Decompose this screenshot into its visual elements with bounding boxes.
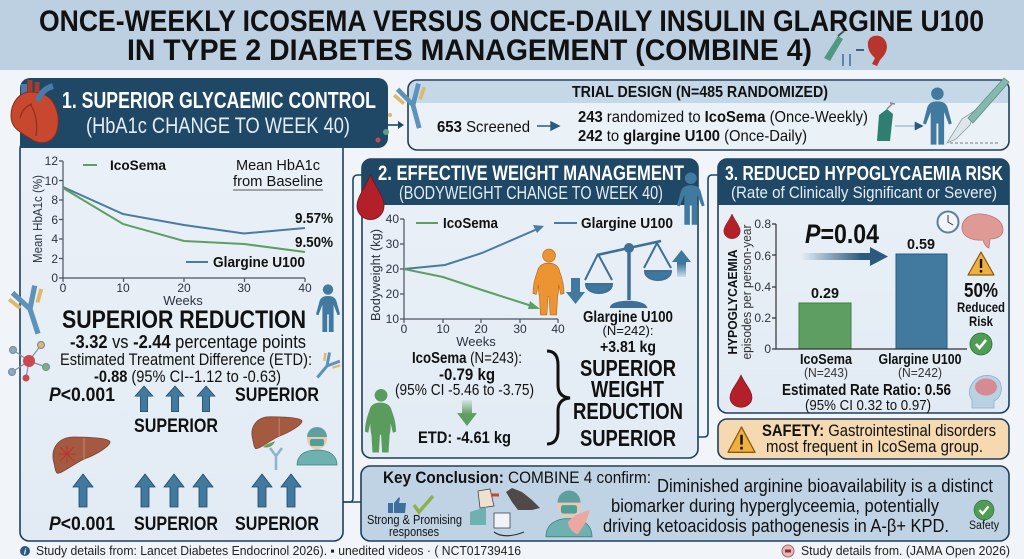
icon: check: [970, 333, 992, 355]
statistics text: [60, 332, 312, 386]
icon: head with brain: [969, 375, 1001, 408]
icon: blood drop: [357, 175, 384, 220]
line chart: bodyweight: 40: [551, 322, 565, 336]
bar chart: Glargine U100: [878, 352, 962, 368]
icon: molecule: [8, 342, 50, 382]
randomization text: 243 randomized to IcoSema (Once-Weekly): [578, 109, 868, 126]
bar chart: (N=242): [898, 365, 942, 380]
icon: down arrow: [566, 278, 585, 304]
icon: up arrow: [672, 250, 691, 277]
line chart: HbA1c: 10: [45, 174, 58, 188]
line chart: HbA1c: 0: [51, 271, 58, 285]
source text: Study details from. (JAMA Open 2026): [801, 544, 1010, 558]
bar chart: 0.29: [811, 285, 839, 302]
line chart: HbA1c: 9.57%: [295, 210, 333, 227]
panel header: 1. SUPERIOR GLYCAEMIC CONTROL: [62, 87, 376, 113]
conclusion text: [603, 476, 993, 536]
bar chart: 0.2: [754, 311, 771, 325]
panel: key conclusion: [361, 466, 1009, 541]
line chart: bodyweight: IcoSema: [443, 215, 499, 232]
result row 2: P<0.001: [49, 514, 115, 535]
icon: patient: [923, 87, 952, 145]
panel: weight management: [357, 159, 705, 458]
line chart: HbA1c: Mean HbA1c: [236, 157, 320, 174]
line chart: HbA1c: 2: [51, 252, 58, 266]
line chart: HbA1c: 0: [60, 281, 67, 295]
icon: warning: [968, 252, 994, 275]
molecule beside header: [376, 113, 392, 142]
icon: thumbs up and check: [388, 496, 433, 513]
title text: [39, 5, 984, 67]
icon: green person: [365, 389, 396, 452]
line chart: bodyweight: 20: [386, 287, 399, 301]
icon: balance scale: [585, 241, 671, 307]
icon: info: i: [24, 548, 27, 556]
icon: clock: [938, 212, 958, 232]
line chart: HbA1c: from Baseline: [233, 173, 323, 190]
result row 1: P<0.001: [49, 385, 115, 406]
bar chart: 0.6: [754, 249, 771, 263]
line chart: HbA1c: 8: [51, 193, 58, 207]
icon: clinician: [297, 427, 337, 465]
title banner: [0, 0, 1024, 70]
panel header: (HbA1c CHANGE TO WEEK 40): [86, 113, 350, 138]
icon: scalpel: [947, 78, 1009, 143]
risk reduction text: Reduced: [957, 299, 1005, 315]
line chart: bodyweight: Bodyweight (kg): [368, 229, 383, 321]
line chart: bodyweight: 0: [401, 322, 408, 336]
footer: right source: [782, 544, 1010, 558]
conclusion heading: Key Conclusion: COMBINE 4 confirm:: [383, 468, 651, 487]
brace: [547, 351, 570, 444]
arrow: screened to randomized: [537, 122, 559, 130]
line chart: bodyweight: Weeks: [456, 334, 496, 349]
icon: seal: [782, 545, 794, 557]
rate ratio text: [782, 382, 951, 414]
panel: trial design: [376, 78, 1009, 150]
line chart: HbA1c: 4: [51, 232, 58, 246]
line chart: HbA1c: 12: [45, 154, 58, 168]
statistics text: -0.88 (95% CI--1.12 to -0.63): [94, 367, 281, 386]
panel header: [718, 159, 1009, 205]
panel header: [20, 78, 388, 148]
arrow: panel one to trial design: [398, 121, 404, 129]
statistics text: Estimated Treatment Difference (ETD):: [60, 350, 312, 369]
icon: info: [20, 546, 30, 556]
icosema result: (95% CI -5.46 to -3.75): [395, 382, 534, 399]
icon: person: [677, 172, 705, 225]
superior weight reduction text: SUPERIOR: [580, 355, 676, 381]
risk reduction text: 50%: [964, 280, 998, 302]
panel body: [20, 140, 343, 541]
result row 1: SUPERIOR: [235, 385, 319, 406]
icon: surgeon: [546, 490, 592, 537]
title text: IN TYPE 2 DIABETES MANAGEMENT (COMBINE 4): [127, 34, 812, 67]
result row 1: SUPERIOR: [134, 416, 218, 437]
line chart: HbA1c: Weeks: [163, 293, 203, 308]
icon: injection pen to heart: [824, 31, 887, 66]
panel header: 2. EFFECTIVE WEIGHT MANAGEMENT: [378, 162, 684, 185]
superior weight reduction text: WEIGHT: [591, 376, 664, 402]
line chart: HbA1c: 30: [237, 281, 251, 295]
line chart: bodyweight: 40: [386, 212, 399, 226]
risk reduction text: Risk: [969, 313, 993, 329]
line chart: bodyweight: Glargine U100: [581, 215, 673, 232]
icon: bottom drop: [730, 375, 752, 407]
line chart: bodyweight: 10: [386, 312, 399, 326]
result row 2: SUPERIOR: [235, 514, 319, 535]
icon: antibody right: [310, 351, 342, 384]
rate ratio text: (95% CI 0.32 to 0.97): [805, 397, 931, 414]
icon: safety check: [974, 500, 994, 520]
result row 2: SUPERIOR: [134, 514, 218, 535]
safety text: most frequent in IcoSema group.: [766, 438, 983, 456]
p-value: P=0.04: [805, 219, 879, 249]
responses caption: Strong & Promising: [367, 513, 462, 527]
bar chart: episodes per person-year: [739, 224, 754, 360]
glargine result: Glargine U100: [583, 309, 673, 326]
icosema result: IcoSema (N=243):: [412, 350, 522, 367]
superior weight reduction text: SUPERIOR: [580, 425, 676, 451]
randomization text: 242 to glargine U100 (Once-Daily): [578, 128, 807, 145]
footer: left source: [20, 544, 521, 558]
icon: brain: [962, 214, 1003, 248]
responses caption: responses: [389, 525, 439, 539]
icon: top drop: [724, 214, 740, 239]
conclusion text: biomarker during hyperglyceemia, potentially: [611, 496, 939, 516]
line chart: bodyweight: 20: [474, 322, 488, 336]
bar chart: 0: [764, 342, 771, 356]
panel: safety callout: [718, 419, 1009, 459]
bar chart: 0.59: [907, 236, 935, 253]
trial design header strip: [409, 81, 1008, 103]
icosema result: ETD: -4.61 kg: [418, 429, 511, 447]
randomization text: [578, 109, 868, 145]
line chart: bodyweight: 30: [386, 237, 399, 251]
bar chart: 0.8: [754, 217, 771, 231]
connector arrows between panels: [343, 125, 718, 502]
panel header: [362, 159, 698, 205]
line chart: bodyweight: 30: [513, 322, 527, 336]
line chart: HbA1c: Glargine U100: [213, 254, 305, 271]
line chart: HbA1c: Mean HbA1c (%): [30, 175, 45, 263]
bar chart: 0.4: [754, 280, 771, 294]
rate ratio text: Estimated Rate Ratio: 0.56: [782, 382, 951, 399]
screened count: 653 Screened: [437, 119, 530, 136]
icon: green arrow: [457, 400, 477, 426]
line chart: HbA1c: IcoSema: [110, 157, 166, 173]
superior weight reduction text: [573, 355, 683, 451]
safety text: SAFETY: Gastrointestinal disorders: [762, 422, 996, 440]
icon: antibody left: [7, 284, 54, 339]
headline result: SUPERIOR REDUCTION: [62, 306, 306, 334]
result row 2: [49, 474, 319, 535]
icon: liver with antibody: [252, 417, 302, 470]
responses caption: [367, 513, 462, 539]
conclusion text: driving ketoacidosis pathogenesis in A-β+ KPD.: [603, 516, 949, 536]
icon: person: [316, 284, 340, 332]
icosema result: -0.79 kg: [439, 365, 495, 384]
bar chart: IcoSema: [800, 352, 853, 368]
bar chart: (N=243): [804, 365, 848, 380]
trial design header strip: TRIAL DESIGN (N=485 RANDOMIZED): [572, 84, 828, 101]
glargine result: (N=242):: [603, 323, 653, 338]
icon: lab mouse and hand: [470, 488, 540, 536]
panel header: (BODYWEIGHT CHANGE TO WEEK 40): [399, 183, 663, 203]
icon: warning: [728, 427, 755, 452]
bar chart: [725, 217, 967, 380]
icon: injection device: [877, 103, 895, 141]
safety text: [762, 422, 996, 456]
panel header: (Rate of Clinically Significant or Severe): [731, 183, 997, 202]
line chart: HbA1c: [30, 154, 333, 308]
glargine result: [583, 309, 673, 356]
panel: hypoglycaemia risk: [718, 159, 1009, 414]
line chart: HbA1c: 6: [51, 213, 58, 227]
arrow: p-value: [801, 247, 888, 266]
glargine result: +3.81 kg: [600, 339, 656, 356]
icon: antibody: [393, 82, 434, 132]
line chart: bodyweight: 20: [386, 262, 399, 276]
panel: glycaemic control: [7, 78, 388, 541]
icosema result: [395, 350, 534, 447]
source text: Study details from: Lancet Diabetes Endocrinol 2026). ▪ unedited videos · ( NCT01739416: [36, 544, 521, 558]
result row 1: [49, 385, 319, 437]
safety caption: Safety: [969, 520, 999, 532]
statistics text: -3.32 vs -2.44 percentage points: [70, 332, 306, 352]
line chart: bodyweight: 10: [436, 322, 450, 336]
icon: heart: [11, 80, 58, 143]
line chart: HbA1c: 10: [116, 281, 130, 295]
superior weight reduction text: REDUCTION: [573, 398, 683, 424]
bar chart: HYPOGLYCAEMIA: [725, 249, 740, 354]
line chart: bodyweight: [368, 212, 673, 349]
conclusion text: Diminished arginine bioavailability is a distinct: [657, 476, 993, 496]
line chart: HbA1c: 40: [298, 281, 312, 295]
line chart: HbA1c: 9.50%: [295, 234, 333, 251]
icon: orange person: [533, 249, 564, 315]
icon: damaged liver: [53, 437, 110, 473]
risk reduction text: [957, 280, 1005, 329]
line chart: HbA1c: 20: [177, 281, 191, 295]
arrow: device to patient: [895, 122, 923, 130]
